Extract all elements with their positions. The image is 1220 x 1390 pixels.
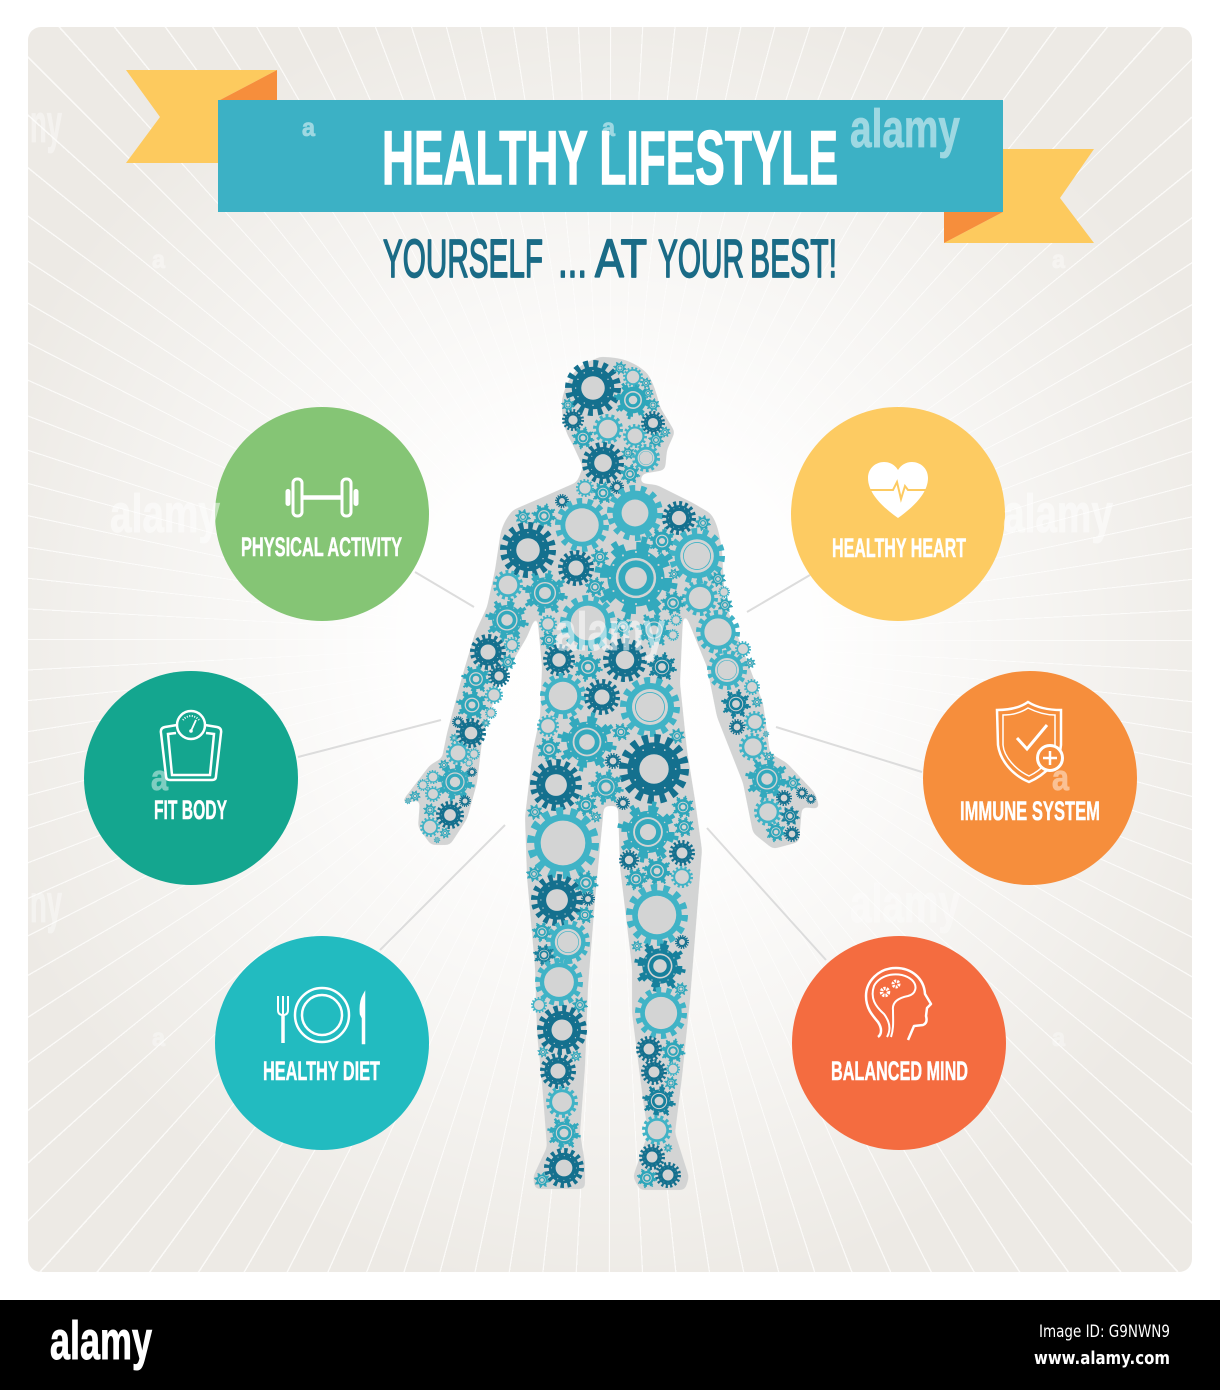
icon: head with brain and gears <box>866 968 931 1040</box>
gears: legs and feet <box>526 800 693 1189</box>
ribbon left fold <box>220 70 277 100</box>
subtitle: YOUR <box>658 229 744 289</box>
circle: immune system <box>923 671 1137 885</box>
watermarks: a <box>1052 246 1066 274</box>
circle: healthy diet <box>215 936 429 1150</box>
gears: head and neck <box>556 361 671 507</box>
watermarks: alamy <box>110 484 220 544</box>
title: HEALTHY LIFESTYLE <box>382 116 838 201</box>
watermarks <box>30 94 1113 1052</box>
icon: weighing scale <box>161 711 221 780</box>
watermarks: alamy <box>850 99 960 159</box>
ribbon left tail <box>126 70 277 163</box>
footer logo: alamy <box>50 1311 152 1371</box>
watermarks: a <box>602 114 616 142</box>
banner ribbon <box>126 70 1094 243</box>
icon: heart with pulse <box>868 462 928 518</box>
ribbon main band <box>218 100 1003 212</box>
watermarks: a <box>152 246 166 274</box>
watermarks: a <box>151 757 169 798</box>
circle: healthy heart <box>791 407 1005 621</box>
watermarks: a <box>1052 757 1070 798</box>
subtitle <box>383 229 837 289</box>
subtitle: ... <box>558 229 587 289</box>
subtitle: YOURSELF <box>383 229 543 289</box>
watermarks: ny <box>30 874 62 934</box>
connector lines <box>298 572 922 960</box>
gears: hands <box>404 756 815 844</box>
label: balanced mind: BALANCED MIND <box>831 1056 968 1086</box>
watermarks: a <box>152 1024 166 1052</box>
label: immune system: IMMUNE SYSTEM <box>960 796 1100 826</box>
watermarks: alamy <box>1003 484 1113 544</box>
circle: physical activity <box>215 407 429 621</box>
watermarks: alamy <box>850 874 960 934</box>
body silhouette <box>400 357 820 1190</box>
watermarks: a <box>1052 1024 1066 1052</box>
watermarks: ny <box>30 94 62 154</box>
label: healthy diet: HEALTHY DIET <box>263 1056 380 1086</box>
label: physical activity: PHYSICAL ACTIVITY <box>241 532 402 562</box>
watermarks: a <box>302 114 316 142</box>
ribbon right tail <box>944 149 1094 243</box>
circle: balanced mind <box>792 936 1006 1150</box>
footer image id: Image ID: G9NWN9 <box>1039 1322 1170 1342</box>
subtitle: AT <box>595 229 647 289</box>
footer bar <box>0 1300 1220 1390</box>
gears: torso and arms <box>448 489 775 838</box>
human body made of gears <box>400 357 820 1190</box>
icon: shield with check and plus <box>997 702 1062 782</box>
watermarks: alamy <box>555 602 665 662</box>
subtitle: BEST! <box>750 229 837 289</box>
icon: plate with fork and knife <box>278 988 364 1043</box>
icon: dumbbell <box>286 479 358 516</box>
footer url: www.alamy.com <box>1034 1348 1170 1369</box>
ribbon right fold <box>944 212 1003 243</box>
label: fit body: FIT BODY <box>154 795 227 825</box>
circle: fit body <box>84 671 298 885</box>
label: healthy heart: HEALTHY HEART <box>832 533 966 563</box>
